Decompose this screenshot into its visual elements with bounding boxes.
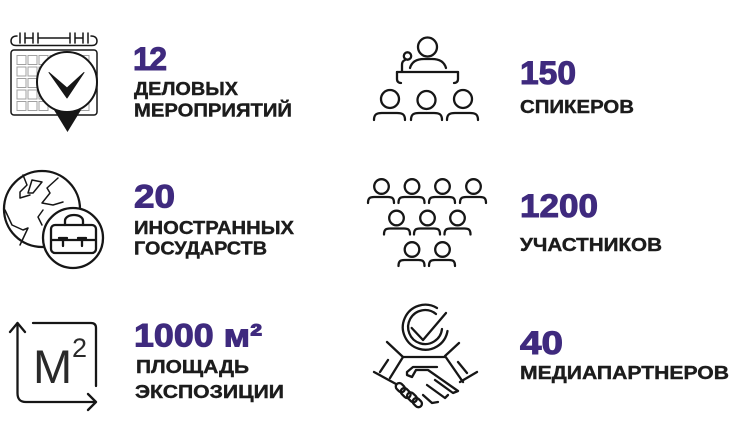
label: площадь экспозиции (135, 357, 284, 402)
icon: square metres: 2 (72, 333, 87, 363)
number: 12: 12 (133, 41, 167, 77)
label: деловых мероприятий (134, 79, 292, 120)
number: 20: 20 (134, 178, 175, 214)
label: участников: УЧАСТНИКОВ (520, 235, 662, 255)
label: спикеров: СПИКЕРОВ (520, 97, 634, 117)
label: иностранных государств (134, 218, 294, 258)
label: иностранных государств: ИНОСТРАННЫХ (134, 218, 294, 238)
icon: handshake with check mark (374, 305, 477, 409)
number: 40: 40 (520, 325, 563, 361)
label: иностранных государств: ГОСУДАРСТВ (134, 238, 267, 258)
icon: speaker at podium with audience (374, 38, 478, 120)
icon: globe with briefcase (4, 171, 103, 268)
label: площадь экспозиции: ПЛОЩАДЬ (136, 357, 249, 377)
icon: calendar with pin (11, 33, 97, 132)
icon: square metres (10, 323, 96, 410)
icon: square metres: M (33, 340, 72, 393)
number: 150: 150 (520, 55, 576, 91)
label: деловых мероприятий: МЕРОПРИЯТИЙ (134, 100, 292, 120)
number: 1000 м2: 1000 м² (134, 318, 262, 354)
label: площадь экспозиции: ЭКСПОЗИЦИИ (135, 382, 284, 402)
label: медиапартнеров: МЕДИАПАРТНЕРОВ (520, 363, 729, 383)
number: 1200: 1200 (520, 188, 598, 224)
label: деловых мероприятий: ДЕЛОВЫХ (134, 79, 238, 99)
icon: audience group (368, 179, 486, 266)
